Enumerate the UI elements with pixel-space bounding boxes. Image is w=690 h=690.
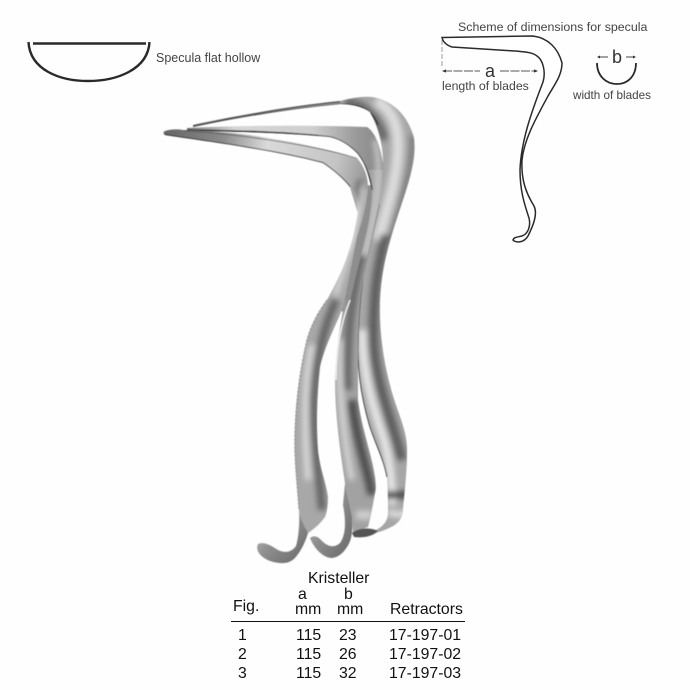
table row 2: 2	[238, 646, 247, 663]
table row 3: 17-197-03	[389, 665, 461, 682]
back hook hollow	[352, 529, 378, 537]
table row 2: 115	[296, 646, 321, 663]
table header: mm	[337, 601, 363, 618]
table header: a	[298, 586, 307, 603]
table row 3: 3	[238, 665, 247, 682]
table row 1	[238, 627, 461, 644]
middle hook	[310, 483, 352, 558]
front hook	[257, 510, 308, 563]
dimension a: length of blades: length of blades	[442, 79, 529, 93]
table header: Retractors	[390, 601, 463, 618]
neck: overlapping shafts	[327, 185, 380, 312]
retractor 1: front, lower blade	[160, 125, 375, 563]
table header: b	[344, 586, 353, 603]
table row 3: 115	[296, 665, 321, 682]
illustration: three Kristeller retractors	[160, 90, 420, 563]
retractor 3: largest, back	[180, 90, 420, 540]
dimension b: width of blades: b	[612, 47, 622, 67]
table row 2: 26	[339, 646, 357, 663]
table header	[233, 586, 463, 618]
table row 1: 23	[339, 627, 357, 644]
table: Kristeller sizes	[231, 570, 465, 682]
retractor 2: middle	[180, 120, 390, 558]
table row 2	[238, 646, 461, 663]
diagram: speculum outline	[442, 36, 562, 242]
table row 3	[238, 665, 461, 682]
dimension b: width of blades	[572, 47, 651, 102]
table row 1: 1	[238, 627, 247, 644]
label: specula flat hollow: Specula flat hollow	[156, 51, 261, 65]
table row 1: 115	[296, 627, 321, 644]
dimension a: length of blades	[442, 40, 538, 93]
dimension a: length of blades: a	[485, 61, 496, 81]
table row 3: 32	[339, 665, 357, 682]
heading: scheme of dimensions: Scheme of dimensions for specula	[458, 20, 648, 34]
table row 2: 17-197-02	[389, 646, 461, 663]
icon: specula flat hollow cross-section	[28, 42, 150, 81]
table header: mm	[295, 601, 321, 618]
table row 1: 17-197-01	[389, 627, 461, 644]
diagram: scheme of dimensions	[442, 20, 651, 242]
table header: Fig.	[233, 598, 259, 615]
dimension b: width of blades: width of blades	[572, 89, 651, 102]
table title: Kristeller	[308, 570, 369, 587]
